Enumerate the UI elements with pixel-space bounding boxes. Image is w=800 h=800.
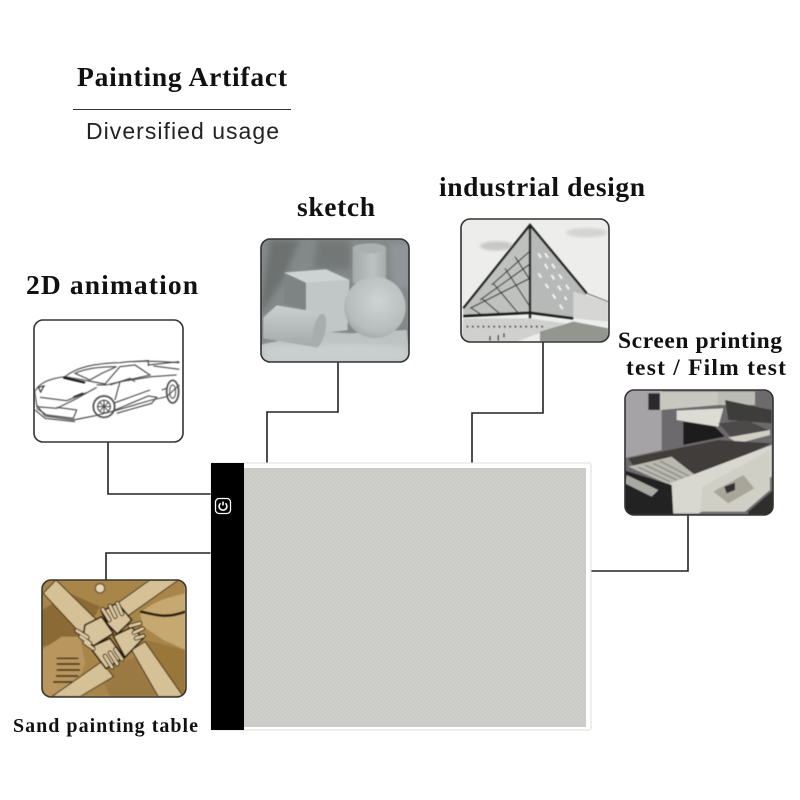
icon: power button	[216, 498, 230, 514]
heading: industrial design: industrial design	[439, 171, 645, 202]
heading: screen printing / film test	[618, 328, 786, 381]
panel: sand painting	[42, 579, 186, 697]
heading: screen printing / film test: test / Film test	[626, 355, 786, 381]
black control strip	[211, 463, 244, 730]
title divider	[73, 109, 291, 110]
connector: sand painting	[106, 553, 211, 580]
panel: plaster shapes sketch	[260, 238, 410, 363]
panel: screen printing machine photo	[623, 390, 773, 515]
panel: industrial building drawing	[461, 219, 609, 342]
light pad tablet	[211, 463, 591, 730]
connector: 2D animation	[108, 442, 211, 494]
heading: sketch: sketch	[297, 191, 375, 222]
light pad surface	[244, 468, 586, 727]
connector: sketch	[267, 362, 338, 463]
connector: industrial design	[472, 342, 543, 463]
heading: 2D animation: 2D animation	[26, 269, 198, 300]
title: Painting Artifact	[77, 61, 288, 92]
heading: screen printing / film test: Screen printing	[618, 328, 782, 354]
connector: screen printing	[591, 515, 688, 571]
subtitle: Diversified usage	[86, 118, 279, 144]
caption: sand painting table: Sand painting table	[13, 715, 198, 737]
panel: car line drawing	[34, 320, 183, 442]
